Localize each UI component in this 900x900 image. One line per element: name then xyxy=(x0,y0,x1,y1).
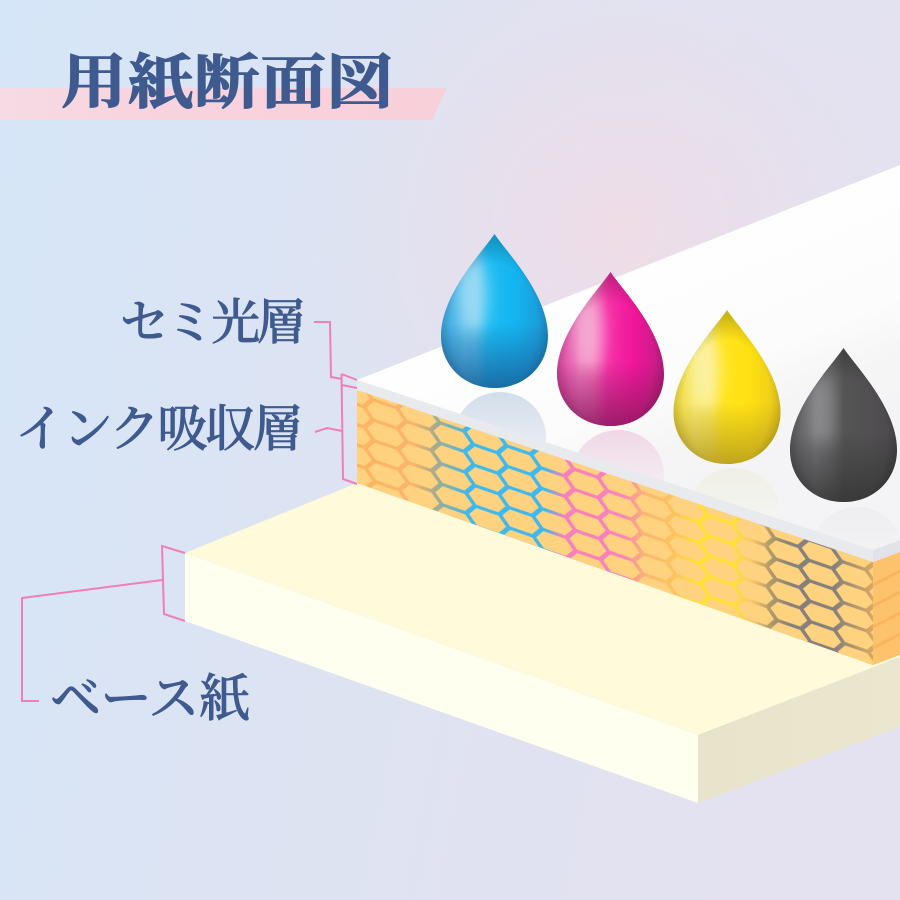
honeycomb ink colours xyxy=(357,390,873,665)
title: 用紙断面図 xyxy=(61,50,393,116)
drop reflections xyxy=(460,392,778,504)
honeycomb cells xyxy=(357,390,873,665)
side face stripes xyxy=(873,571,900,648)
leader: semi-gloss layer xyxy=(314,322,357,388)
semi-gloss top face xyxy=(357,165,900,550)
base paper side face xyxy=(698,657,900,803)
drop: magenta xyxy=(556,272,664,426)
drop: black xyxy=(790,348,898,502)
bracket and leader: base paper xyxy=(22,546,185,701)
drop: yellow xyxy=(673,310,781,464)
base paper front face xyxy=(185,553,698,803)
bracket and leader: ink absorption layer xyxy=(315,374,357,484)
reflection: magenta xyxy=(578,430,664,480)
drop: cyan xyxy=(440,234,548,388)
semi-gloss front edge xyxy=(357,380,873,562)
title band xyxy=(0,88,447,120)
label: semi-gloss layer: セミ光層 xyxy=(120,295,306,350)
ink absorption layer xyxy=(357,390,900,665)
semi-gloss layer xyxy=(357,165,900,562)
base paper top face xyxy=(185,483,900,735)
reflection: black xyxy=(811,507,900,597)
reflection: cyan xyxy=(460,392,546,442)
semi-gloss side edge xyxy=(873,540,900,562)
base paper layer xyxy=(185,483,900,803)
label: ink absorption layer: インク吸収層 xyxy=(15,401,303,457)
label: base paper: ベース紙 xyxy=(50,672,250,728)
reflection: yellow xyxy=(694,468,778,504)
absorption layer side face xyxy=(873,552,900,665)
